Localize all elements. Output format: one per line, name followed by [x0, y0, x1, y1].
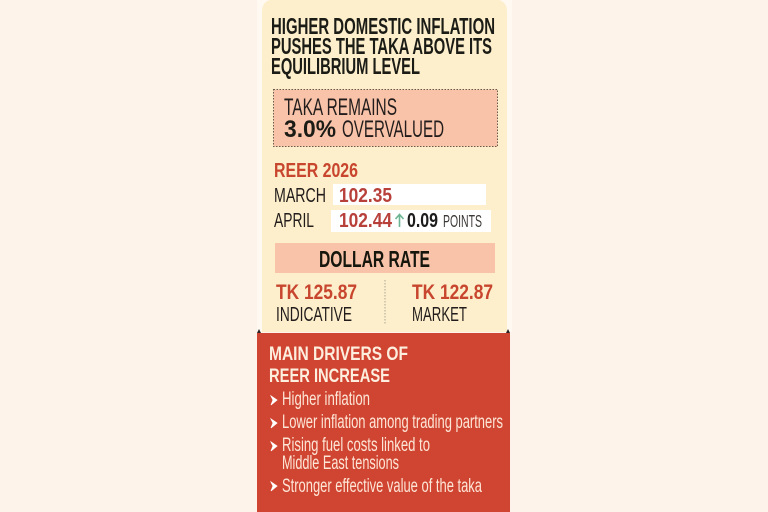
stat: market rate: MARKET — [412, 303, 467, 326]
row: April — [274, 209, 491, 232]
list: drivers: Stronger effective value of the taka — [282, 476, 482, 497]
stat: market rate: TK 122.87 — [412, 280, 493, 304]
row: March: MARCH — [274, 184, 326, 207]
row: March — [274, 184, 486, 207]
list: drivers — [271, 389, 503, 497]
row: March: 102.35 — [339, 184, 392, 207]
heading: main drivers: MAIN DRIVERS OF — [269, 343, 408, 365]
stat: indicative rate: TK 125.87 — [276, 280, 357, 304]
row: April: 0.09 — [407, 209, 438, 232]
band: dollar rate: DOLLAR RATE — [319, 246, 430, 272]
heading: main drivers — [269, 343, 408, 387]
list: drivers: Lower inflation among trading partners — [282, 412, 503, 433]
list: drivers: Middle East tensions — [282, 453, 399, 474]
callout: taka overvalued: 3.0% — [284, 116, 336, 143]
list: drivers: Rising fuel costs linked to — [282, 435, 430, 456]
stat: indicative rate: INDICATIVE — [276, 303, 352, 326]
stat: indicative rate — [276, 280, 357, 326]
row: April: POINTS — [443, 211, 482, 231]
heading: PUSHES THE TAKA ABOVE ITS — [271, 33, 492, 59]
heading — [271, 13, 495, 79]
section: REER 2026: REER 2026 — [274, 159, 358, 182]
heading: HIGHER DOMESTIC INFLATION — [271, 13, 495, 39]
callout: taka overvalued: OVERVALUED — [342, 116, 444, 143]
callout: taka overvalued: TAKA REMAINS — [284, 94, 397, 121]
heading: EQUILIBRIUM LEVEL — [271, 53, 420, 79]
heading: main drivers: REER INCREASE — [269, 365, 390, 387]
panel: cream upper panel — [257, 0, 512, 332]
list: drivers: Higher inflation — [282, 389, 370, 410]
row: April: 102.44 — [339, 209, 393, 232]
icon: up arrow — [396, 214, 404, 227]
band: dollar rate — [275, 243, 495, 273]
callout: taka overvalued — [274, 90, 498, 146]
section: REER 2026 — [274, 159, 491, 232]
row: April: APRIL — [274, 209, 314, 232]
panel: main drivers — [257, 329, 510, 512]
stat: market rate — [412, 280, 493, 326]
